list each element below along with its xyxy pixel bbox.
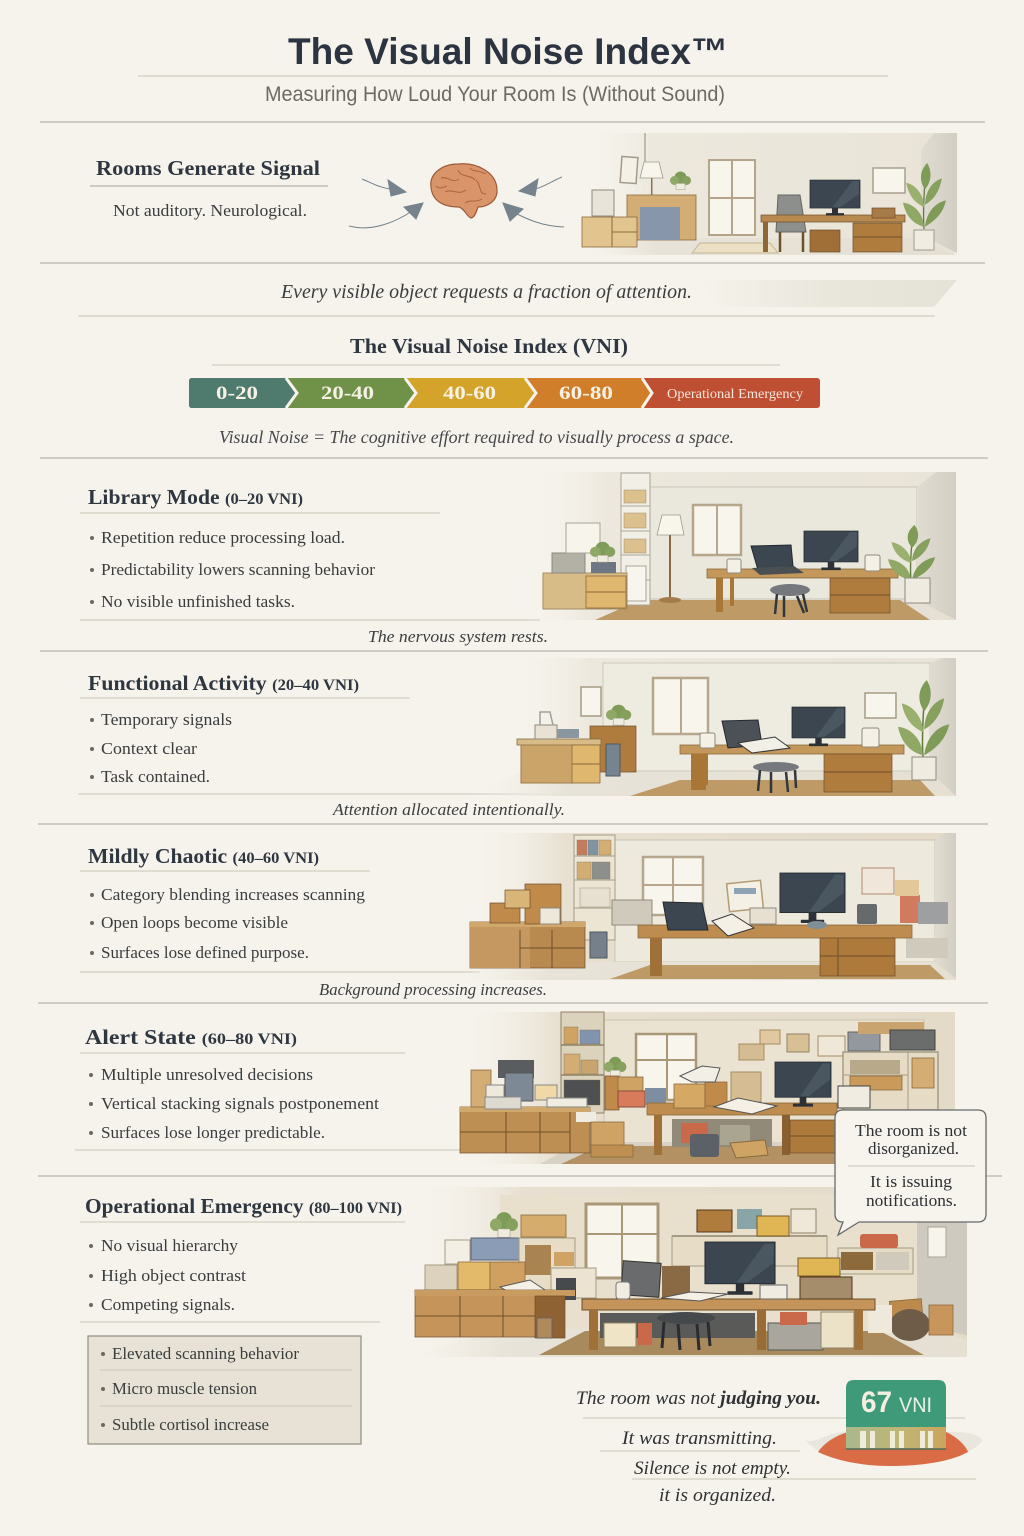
bullet list: Surfaces lose defined purpose.: [101, 943, 309, 962]
bullet list: Vertical stacking signals postponement: [101, 1094, 379, 1113]
definition: Visual Noise = The cognitive effort required to visually process a space.: [219, 427, 734, 447]
closing statements: it is organized.: [659, 1485, 776, 1506]
label 20-40: 20-40: [321, 383, 374, 404]
bullet list: High object contrast: [101, 1266, 246, 1285]
illustration: tidy office: [530, 472, 956, 620]
bullet list: Context clear: [101, 739, 197, 758]
callout: speech bubble: The room is not: [855, 1121, 967, 1140]
title: The Visual Noise Index™: [288, 31, 728, 72]
heading: Operational Emergency (80–100 VNI): [85, 1194, 402, 1218]
label 0-20: 0-20: [216, 383, 258, 404]
bullet list: Surfaces lose longer predictable.: [101, 1123, 325, 1142]
illustration: overloaded office: [400, 1187, 967, 1357]
text: not auditory: Not auditory. Neurological.: [113, 201, 307, 220]
bullet list: Predictability lowers scanning behavior: [101, 560, 375, 579]
bullet list: Task contained.: [101, 767, 210, 786]
bullet list: No visual hierarchy: [101, 1236, 238, 1255]
badge: 67 VNI meter: [805, 1380, 983, 1466]
bullet list: Repetition reduce processing load.: [101, 528, 345, 547]
strip shape behind statement: [700, 280, 957, 307]
statement: Every visible object requests a fraction of attention.: [280, 281, 692, 303]
closing statements: It was transmitting.: [621, 1428, 777, 1449]
panel: alert state: [38, 1012, 1002, 1176]
caption line extends past bubble: [38, 1175, 1002, 1177]
item: scanning: Elevated scanning behavior: [112, 1344, 299, 1363]
caption: Attention allocated intentionally.: [332, 800, 565, 819]
heading: Library Mode (0–20 VNI): [88, 485, 303, 509]
panel: mildly chaotic: [80, 833, 956, 999]
label operational emergency: Operational Emergency: [667, 387, 803, 402]
callout: speech bubble: It is issuing: [870, 1172, 953, 1191]
icon: brain: [431, 164, 497, 218]
heading: Mildly Chaotic (40–60 VNI): [88, 844, 319, 868]
illustration: calm room: [580, 133, 957, 255]
label 60-80: 60-80: [559, 383, 613, 404]
callout: speech bubble: [835, 1110, 986, 1235]
item: cortisol: Subtle cortisol increase: [112, 1415, 269, 1434]
subtitle: Measuring How Loud Your Room Is (Without Sound): [265, 83, 725, 106]
value: 67: [861, 1386, 892, 1419]
bullet list: [89, 1236, 246, 1314]
illustration: working office: [470, 658, 956, 796]
heading: Rooms Generate Signal: [96, 156, 320, 180]
heading: Functional Activity (20–40 VNI): [88, 671, 359, 695]
unit: VNI: [899, 1394, 932, 1417]
label 40-60: 40-60: [443, 383, 496, 404]
bullet list: [90, 528, 375, 611]
bullet list: [90, 710, 232, 786]
callout: speech bubble: disorganized.: [868, 1139, 959, 1158]
panel: functional activity: [78, 658, 956, 819]
bullet list: Multiple unresolved decisions: [101, 1065, 313, 1084]
arrows pointing at brain: [349, 177, 564, 228]
illustration: alert office: [460, 1012, 955, 1164]
closing statements: Silence is not empty.: [634, 1458, 791, 1479]
bullet list: No visible unfinished tasks.: [101, 592, 295, 611]
heading: VNI scale: The Visual Noise Index (VNI): [350, 334, 628, 358]
bullet list: Competing signals.: [101, 1295, 235, 1314]
panel: body response list: [88, 1336, 361, 1444]
bullet list: [90, 885, 365, 962]
closing statements: [576, 1388, 976, 1506]
bullet list: Temporary signals: [101, 710, 232, 729]
caption: The nervous system rests.: [368, 627, 548, 646]
panel: library mode: [80, 472, 956, 646]
caption: Background processing increases.: [319, 980, 547, 999]
heading: Alert State (60–80 VNI): [85, 1025, 297, 1049]
scale bar: [189, 378, 820, 408]
bullet list: Open loops become visible: [101, 913, 288, 932]
panel: rooms generate signal: [90, 133, 957, 255]
bullet list: [89, 1065, 379, 1142]
bullet list: Category blending increases scanning: [101, 885, 365, 904]
closing statements: The room was not judging you.: [576, 1388, 821, 1409]
panel: operational emergency: [80, 1187, 967, 1444]
illustration: mildly cluttered office: [450, 833, 956, 980]
callout: speech bubble: notifications.: [866, 1191, 957, 1210]
item: tension: Micro muscle tension: [112, 1379, 257, 1398]
